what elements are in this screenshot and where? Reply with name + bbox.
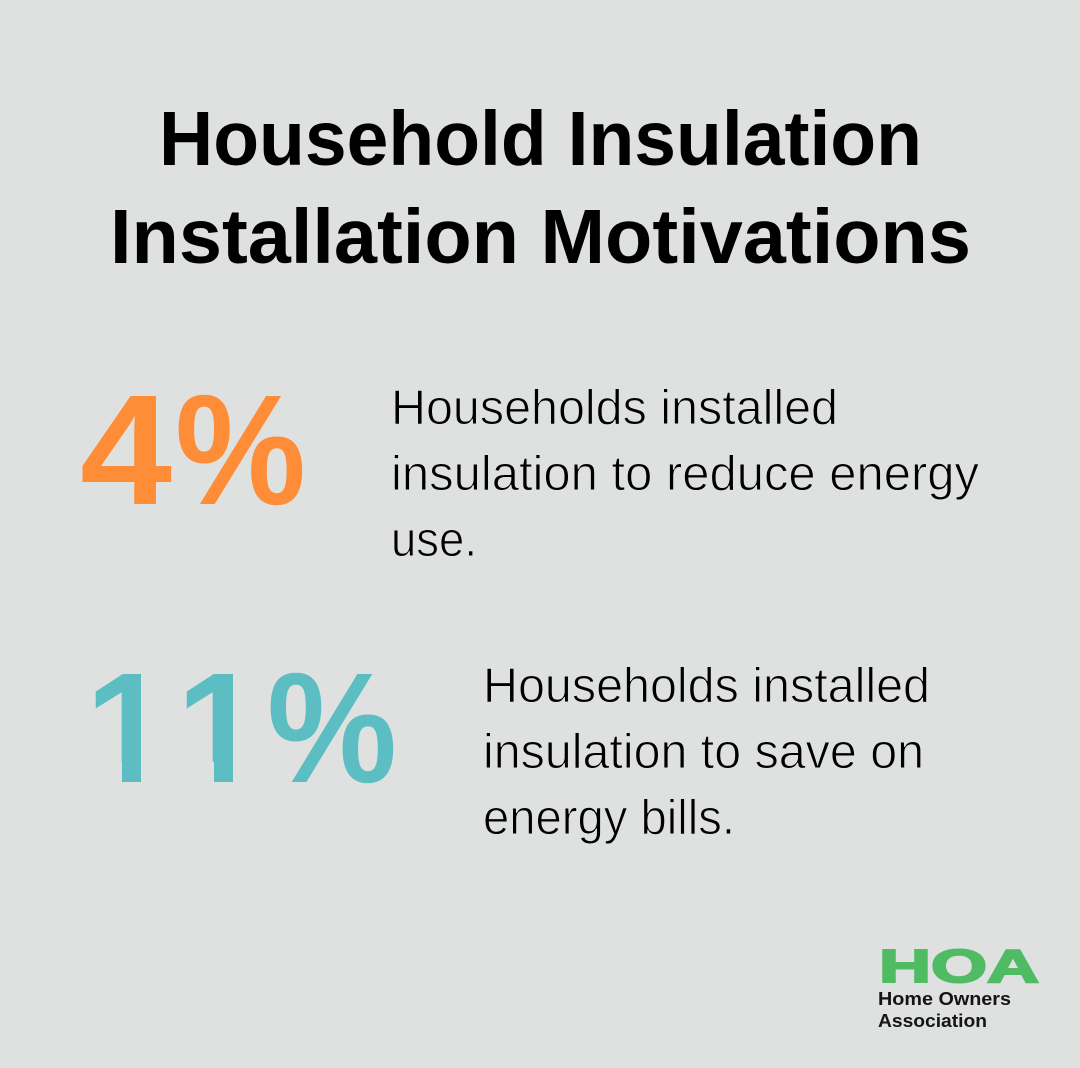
text: save on energy bills: Households installed bbox=[483, 659, 930, 713]
stat: 4 percent: % bbox=[175, 363, 306, 538]
text: save on energy bills: energy bills. bbox=[483, 791, 735, 845]
title: Household Insulation bbox=[159, 96, 922, 182]
title bbox=[110, 96, 971, 280]
stat: 4 percent: 4 bbox=[80, 363, 172, 538]
logo: Home Owners Association: Home Owners bbox=[878, 989, 1011, 1009]
stat: 11 percent bbox=[96, 672, 394, 784]
stat: 11 percent: 1 bbox=[85, 641, 172, 816]
logo: Home Owners Association: HOA bbox=[879, 940, 1039, 992]
title: Installation Motivations bbox=[110, 194, 971, 280]
stat: 11 percent: % bbox=[267, 641, 397, 816]
text: reduce energy use: Households installed bbox=[391, 381, 838, 435]
text: save on energy bills: insulation to save on bbox=[483, 725, 924, 779]
logo: Home Owners Association: Association bbox=[878, 1011, 987, 1031]
text: reduce energy use: use. bbox=[391, 513, 477, 567]
stat: 11 percent: 1 bbox=[176, 641, 263, 816]
logo: Home Owners Association bbox=[878, 940, 1039, 1031]
text: reduce energy use bbox=[391, 381, 979, 567]
infographic canvas bbox=[82, 109, 1040, 1027]
stat: 4 percent bbox=[80, 363, 306, 538]
text: reduce energy use: insulation to reduce energy bbox=[391, 447, 979, 501]
text: save on energy bills bbox=[483, 659, 930, 845]
